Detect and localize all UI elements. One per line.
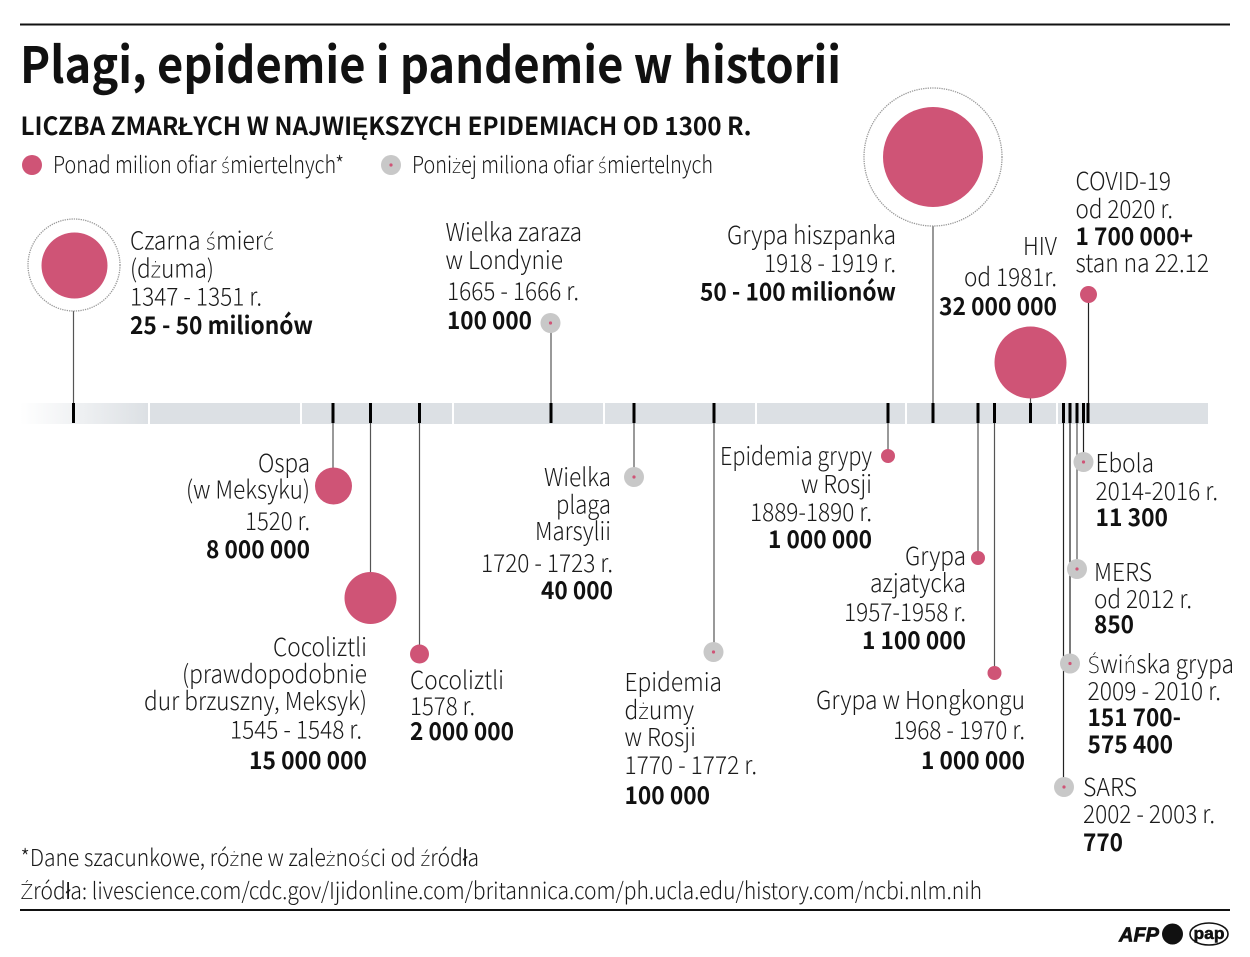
event: Grypa hiszpanka: 1918 - 1919 r.: [764, 244, 896, 280]
event: Ebola: 11 300: [1096, 499, 1168, 534]
event: Grypa w Hongkongu: Grypa w Hongkongu: [816, 681, 1025, 717]
event: Grypa hiszpanka: 50 - 100 milionów: [700, 274, 896, 308]
event: Grypa azjatycka: [844, 537, 985, 657]
timeline bar: [20, 403, 1208, 424]
event: Ospa: 1520 r.: [245, 502, 310, 538]
event: Cocoliztli 1545: dur brzuszny, Meksyk): [144, 682, 367, 718]
event: Ebola: 2014-2016 r.: [1096, 472, 1218, 508]
event: Świńska grypa: 575 400: [1088, 726, 1173, 761]
event: Cocoliztli 1545: 1545 - 1548 r.: [230, 710, 362, 746]
event: Ospa: (w Meksyku): [186, 470, 310, 506]
event: SARS: 2002 - 2003 r.: [1083, 795, 1215, 831]
event: COVID-19: [1076, 162, 1209, 303]
event: Ebola: Ebola: [1096, 444, 1154, 480]
connector lines: [74, 200, 1088, 787]
event: Czarna śmierć: (dżuma): [130, 250, 214, 286]
event: Wielka zaraza w Londynie: 1665 - 1666 r.: [447, 272, 579, 308]
legend item: over one million: Ponad milion ofiar śmiertelnych*: [53, 146, 344, 180]
legend item: under one million: Poniżej miliona ofiar śmiertelnych: [412, 146, 713, 180]
timeline ticks: [72, 403, 1090, 423]
event: COVID-19: od 2020 r.: [1076, 190, 1173, 226]
event: Wielka zaraza w Londynie: 100 000: [447, 302, 532, 337]
event: SARS: SARS: [1083, 768, 1137, 804]
event: Epidemia dżumy w Rosji: Epidemia: [624, 663, 722, 699]
event: MERS: MERS: [1094, 553, 1152, 589]
event: Świńska grypa: 2009 - 2010 r.: [1088, 672, 1221, 708]
event: MERS: 850: [1094, 606, 1134, 641]
event: Grypa hiszpanka: Grypa hiszpanka: [727, 216, 896, 252]
event: Epidemia grypy w Rosji: Epidemia grypy: [720, 437, 872, 473]
event: COVID-19: stan na 22.12: [1076, 244, 1209, 280]
event: Wielka zaraza w Londynie: [446, 213, 582, 337]
event: HIV: 32 000 000: [939, 288, 1057, 323]
logo: PAP: [1190, 923, 1228, 945]
event: Grypa w Hongkongu: 1 000 000: [921, 742, 1025, 777]
event: Grypa azjatycka: Grypa: [905, 537, 966, 573]
event: Świńska grypa: Świńska grypa: [1088, 645, 1234, 681]
event: Cocoliztli 1545: 15 000 000: [249, 742, 367, 777]
event: Świńska grypa: [1060, 645, 1234, 761]
event: HIV: [939, 227, 1066, 398]
event: COVID-19: COVID-19: [1076, 162, 1171, 198]
event: Czarna śmierć: 25 - 50 milionów: [130, 307, 313, 342]
event: Epidemia grypy w Rosji: w Rosji: [801, 465, 872, 501]
event: Epidemia dżumy w Rosji: 100 000: [624, 777, 710, 812]
legend: [22, 146, 713, 180]
event: SARS: [1054, 768, 1215, 859]
event: Wielka plaga Marsylii: [481, 458, 644, 607]
event: Wielka zaraza w Londynie: Wielka zaraza: [446, 213, 582, 249]
event: Cocoliztli 1545: (prawdopodobnie: [182, 655, 367, 691]
event: Cocoliztli 1578: Cocoliztli: [410, 661, 504, 697]
event: Cocoliztli 1578: 2 000 000: [410, 713, 514, 748]
event: Grypa azjatycka: azjatycka: [870, 564, 966, 600]
event: Czarna śmierć: Czarna śmierć: [130, 222, 274, 258]
logo: AFP: [1118, 924, 1183, 946]
event: Epidemia dżumy w Rosji: dżumy: [624, 691, 694, 727]
event: HIV: od 1981r.: [964, 258, 1057, 294]
event: Czarna śmierć: [28, 219, 313, 342]
event: Czarna śmierć: 1347 - 1351 r.: [130, 278, 262, 314]
logo: AFP: AFP: [1118, 924, 1160, 946]
event: Epidemia grypy w Rosji: 1 000 000: [768, 521, 872, 556]
event: Wielka plaga Marsylii: 1720 - 1723 r.: [481, 544, 613, 580]
event: Świńska grypa: 151 700-: [1088, 699, 1181, 734]
event: Grypa hiszpanka: [700, 88, 1002, 308]
event: Grypa w Hongkongu: 1968 - 1970 r.: [893, 711, 1025, 747]
event: Cocoliztli 1578: [410, 644, 514, 748]
event: Epidemia grypy w Rosji: 1889-1890 r.: [750, 493, 872, 529]
event: Grypa azjatycka: 1957-1958 r.: [844, 593, 966, 629]
event: SARS: 770: [1083, 824, 1123, 859]
event: Ospa: 8 000 000: [206, 531, 310, 566]
event: Cocoliztli 1545: Cocoliztli: [273, 628, 367, 664]
event: Wielka zaraza w Londynie: w Londynie: [446, 241, 563, 277]
footnote: *Dane szacunkowe, różne w zależności od źródła: [20, 839, 479, 873]
event: Grypa azjatycka: 1 100 000: [862, 622, 966, 657]
event: Ebola: [1074, 444, 1218, 534]
sources: Źródła: livescience.com/cdc.gov/Ijidonline.com/britannica.com/ph.ucla.edu/history.com/ncbi.nlm.nih: [20, 872, 982, 906]
event: Wielka plaga Marsylii: Wielka: [544, 458, 611, 494]
subtitle: LICZBA ZMARŁYCH W NAJWIĘKSZYCH EPIDEMIACH OD 1300 R.: [20, 107, 752, 143]
title: Plagi, epidemie i pandemie w historii: [20, 26, 841, 98]
event: MERS: od 2012 r.: [1094, 580, 1192, 616]
logo: PAP: pap: [1194, 924, 1224, 943]
event: Epidemia dżumy w Rosji: [624, 642, 757, 812]
event: Epidemia grypy w Rosji: [720, 437, 895, 556]
event: COVID-19: 1 700 000+: [1076, 218, 1193, 253]
event: Cocoliztli 1578: 1578 r.: [410, 687, 475, 723]
event: Epidemia dżumy w Rosji: 1770 - 1772 r.: [624, 746, 757, 782]
event: Ospa: [186, 444, 352, 566]
event: HIV: HIV: [1023, 227, 1057, 263]
event: MERS: [1067, 553, 1192, 641]
event: Cocoliztli 1545: [144, 572, 396, 777]
event: Ospa: Ospa: [258, 444, 310, 480]
event: Wielka plaga Marsylii: Marsylii: [535, 512, 611, 548]
event: Wielka plaga Marsylii: plaga: [556, 486, 611, 522]
event: Grypa w Hongkongu: [816, 666, 1025, 777]
event: Wielka plaga Marsylii: 40 000: [541, 572, 613, 607]
event: Epidemia dżumy w Rosji: w Rosji: [624, 718, 696, 754]
